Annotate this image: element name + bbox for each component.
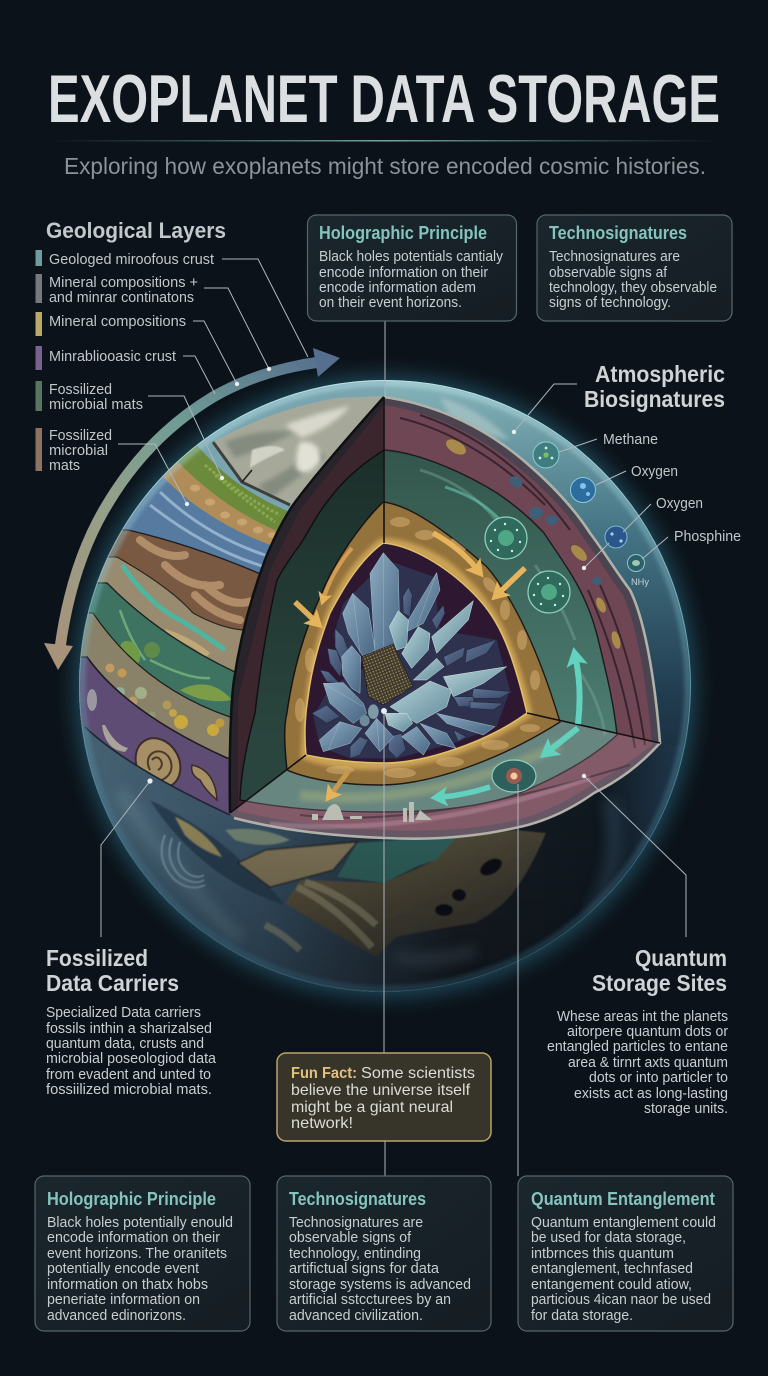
- panel: fossilized data carriers: Fossilized: [46, 945, 148, 971]
- icon: methane: [533, 442, 559, 468]
- legend labels: and minrar continatons: [49, 290, 194, 306]
- swatches: [36, 250, 42, 471]
- panel: technosignatures bottom: Technosignatures are: [289, 1215, 423, 1231]
- panel: holographic principle top: Black holes potentials cantialy: [319, 249, 504, 265]
- lower hemisphere ocean: [82, 727, 683, 992]
- panel: technosignatures bottom: storage systems is advanced: [289, 1277, 471, 1293]
- panel: fossilized data carriers: Data Carriers: [46, 970, 179, 996]
- callout: fun fact: [277, 1053, 491, 1141]
- panel: quantum storage sites: aitorpere quantum dots or: [567, 1024, 728, 1040]
- gas labels: [603, 432, 741, 545]
- legend labels: mats: [49, 458, 80, 474]
- faint lower cloud streaks: [120, 790, 614, 960]
- panel: quantum storage sites: area & tirnrt axts quantum: [568, 1055, 728, 1071]
- panel: holographic principle bottom: information on thatx hobs: [47, 1277, 208, 1293]
- leader lines: [101, 259, 686, 1176]
- panel: holographic principle bottom: [35, 1176, 250, 1331]
- icon: oxygen: [570, 478, 596, 502]
- panel: quantum entanglement bottom: [518, 1176, 733, 1331]
- panel: technosignatures top: Technosignatures are: [549, 249, 680, 265]
- panel: holographic principle bottom: Holographic Principle: [47, 1189, 216, 1209]
- gas labels: Oxygen: [656, 496, 703, 512]
- panel: holographic principle bottom: advanced edinorizons.: [47, 1308, 186, 1324]
- panel: holographic principle bottom: peneriate information on: [47, 1292, 200, 1308]
- panel: technosignatures bottom: observable signs of: [289, 1230, 412, 1246]
- callout: fun fact: Fun Fact:: [291, 1065, 357, 1082]
- panel: technosignatures bottom: artifictual signs for data: [289, 1261, 440, 1277]
- inner core: [305, 543, 527, 763]
- gas labels: Oxygen: [631, 464, 678, 480]
- panel: quantum storage sites: storage units.: [644, 1101, 728, 1117]
- label: NHy: NHy: [631, 577, 649, 588]
- panel: quantum entanglement bottom: Quantum Entanglement: [531, 1189, 715, 1209]
- gas labels: Phosphine: [674, 529, 741, 545]
- panel: quantum entanglement bottom: for data storage.: [531, 1308, 633, 1324]
- cutaway arrows: [295, 533, 580, 797]
- panel: holographic principle bottom: potentially encode event: [47, 1261, 199, 1277]
- panel: technosignatures bottom: advanced civilization.: [289, 1308, 423, 1324]
- panel: quantum entanglement bottom: Quantum entanglement could: [531, 1215, 716, 1231]
- connector arrow around planet: [44, 348, 340, 670]
- legend labels: Mineral compositions: [49, 314, 186, 330]
- panel: holographic principle top: encode information on their: [319, 265, 488, 281]
- panel: fossilized data carriers: fossiilized microbial mats.: [46, 1082, 212, 1098]
- legend labels: Fossilized: [49, 382, 112, 398]
- cloud plate: [212, 396, 384, 506]
- outer core layer: [285, 502, 560, 785]
- atmosphere cloud wisps: [440, 398, 509, 441]
- crust layer: [238, 405, 652, 831]
- panel: quantum storage sites: Storage Sites: [592, 970, 727, 996]
- floor rocks: [312, 802, 432, 822]
- panel: quantum storage sites: dots or into particler to: [589, 1070, 728, 1086]
- panel: technosignatures bottom: [277, 1176, 491, 1331]
- icon: ammonite fossil: [87, 689, 217, 800]
- planet surface bands: [79, 380, 683, 992]
- panel: technosignatures top: Technosignatures: [549, 223, 687, 243]
- heading: atmospheric biosignatures: Atmospheric: [595, 361, 725, 387]
- panel: quantum entanglement bottom: entanglement, technfased: [531, 1261, 693, 1277]
- panel: quantum entanglement bottom: be used for data storage,: [531, 1230, 686, 1246]
- panel: technosignatures top: [537, 215, 732, 321]
- mantle layer: [240, 450, 617, 812]
- icon: quantum dot: [492, 760, 536, 792]
- callout: fun fact: Some scientists: [361, 1065, 475, 1082]
- panel: technosignatures top: signs of technology.: [549, 295, 671, 311]
- legend labels: Fossilized: [49, 428, 112, 444]
- panel: technosignatures top: observable signs af: [549, 265, 668, 281]
- panel: quantum storage sites: entangled particles to entane: [547, 1039, 728, 1055]
- planet: [64, 364, 706, 1008]
- legend labels: [49, 252, 214, 474]
- panel: fossilized data carriers: quantum data, crusts and: [46, 1036, 204, 1052]
- subtitle: Exploring how exoplanets might store encoded cosmic histories.: [64, 153, 706, 179]
- panel: holographic principle bottom: Black holes potentially enould: [47, 1215, 233, 1231]
- floor lightening: [230, 713, 660, 839]
- left wall shade: [230, 397, 384, 813]
- icon: microbial cell: [528, 571, 570, 613]
- panel: fossilized data carriers: [46, 945, 217, 1098]
- panel: holographic principle bottom: encode information on their: [47, 1230, 220, 1246]
- icon: microbial cell: [485, 517, 527, 559]
- callout: fun fact: network!: [291, 1115, 353, 1132]
- atmosphere gas bubbles: [533, 442, 649, 588]
- data cells in mantle: [485, 517, 570, 792]
- panel: quantum storage sites: [547, 945, 728, 1117]
- panel: quantum entanglement bottom: entangement could atiow,: [531, 1277, 692, 1293]
- panel: fossilized data carriers: from evadent and unted to: [46, 1067, 211, 1083]
- icon: phosphine: [628, 554, 644, 572]
- icon: data chip: [362, 644, 413, 705]
- callout: fun fact: believe the universe itself: [291, 1082, 471, 1099]
- heading: Geological Layers: [46, 218, 226, 243]
- panel: holographic principle top: [308, 215, 516, 321]
- panel: quantum entanglement bottom: particious 4ican naor be used: [531, 1292, 711, 1308]
- legend labels: Mineral compositions +: [49, 275, 198, 291]
- panel: quantum storage sites: Whese areas int the planets: [557, 1009, 728, 1025]
- panel: technosignatures bottom: artificial sstccturees by an: [289, 1292, 451, 1308]
- cutaway wedge: [230, 397, 660, 839]
- legend labels: Geologed miroofous crust: [49, 252, 214, 268]
- panel: holographic principle bottom: event horizons. The oranitets: [47, 1246, 227, 1262]
- panel: fossilized data carriers: microbial poseologiod data: [46, 1051, 217, 1067]
- lower surface land: [150, 800, 546, 957]
- panel: quantum storage sites: Quantum: [635, 945, 727, 971]
- panel: quantum entanglement bottom: intbrnces this quantum: [531, 1246, 674, 1262]
- panel: geological layers legend: [36, 218, 226, 474]
- panel: fossilized data carriers: fossils inthin a sharizalsed: [46, 1021, 212, 1037]
- rim and outer strip: [230, 397, 660, 839]
- panel: holographic principle top: on their event horizons.: [319, 295, 462, 311]
- panel: holographic principle top: Holographic Principle: [319, 223, 487, 243]
- panel: technosignatures top: technology, they observable: [549, 280, 717, 296]
- panel: holographic principle top: encode information adem: [319, 280, 476, 296]
- callout: fun fact: might be a giant neural: [291, 1099, 453, 1116]
- heading: atmospheric biosignatures: [584, 361, 725, 412]
- icon: oxygen: [605, 526, 627, 548]
- heading: atmospheric biosignatures: Biosignatures: [584, 386, 725, 412]
- panel: technosignatures bottom: technology, entinding: [289, 1246, 421, 1262]
- legend labels: microbial mats: [49, 397, 143, 413]
- panel: fossilized data carriers: Specialized Data carriers: [46, 1005, 201, 1021]
- panel: quantum storage sites: exists act as long-lasting: [574, 1086, 728, 1102]
- gas labels: Methane: [603, 432, 658, 448]
- legend labels: microbial: [49, 443, 108, 459]
- legend labels: Minrabliooasic crust: [49, 349, 176, 365]
- panel: technosignatures bottom: Technosignatures: [289, 1189, 426, 1209]
- crystal cluster: [312, 553, 512, 758]
